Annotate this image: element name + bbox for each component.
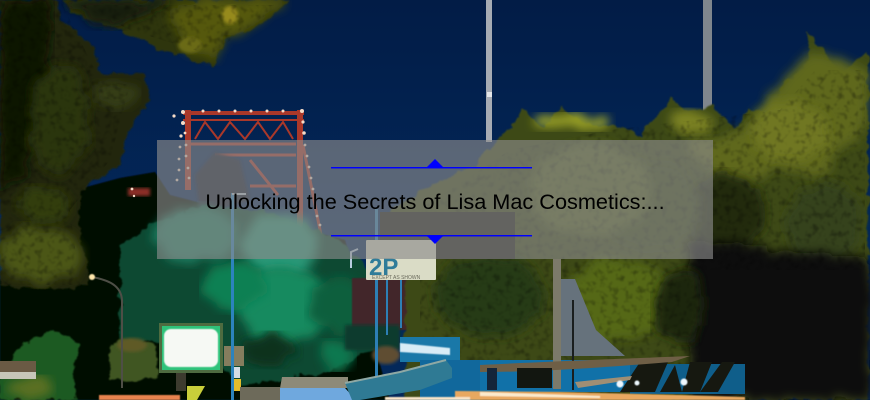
blue street poles xyxy=(231,193,402,400)
bottom divider line xyxy=(331,235,532,236)
2P parking sign: 2P xyxy=(369,254,398,281)
bridge xyxy=(128,109,324,240)
trunks across the water xyxy=(620,362,735,392)
2P parking sign: EXCEPT AS SHOWN xyxy=(372,275,421,281)
2P parking sign xyxy=(366,240,436,281)
grey pillar and deck xyxy=(480,259,690,390)
bottom diamond marker xyxy=(427,236,443,244)
title band: translucent grey overlay xyxy=(157,140,713,259)
dark tree mass mid-left xyxy=(0,172,390,400)
light poles xyxy=(486,0,712,142)
left tree xyxy=(0,0,150,290)
building behind sign xyxy=(345,278,450,364)
dark sign back behind band xyxy=(380,212,515,259)
top divider line xyxy=(331,167,532,168)
heading: Unlocking the Secrets of Lisa Mac Cosmetics:... xyxy=(205,189,665,214)
small street signs xyxy=(0,346,244,400)
right tree mass xyxy=(385,30,870,400)
light trails xyxy=(99,378,745,400)
small tree and plants lower left xyxy=(0,330,158,400)
top diamond marker xyxy=(427,159,443,167)
dark tree behind bridge xyxy=(195,152,250,215)
green lit tree centre-left xyxy=(120,205,395,385)
top tree canopy xyxy=(60,0,290,66)
lit billboard xyxy=(159,323,223,391)
street lamp xyxy=(89,274,122,388)
street water-blue xyxy=(400,337,745,400)
vehicle and guardrail xyxy=(240,360,452,400)
